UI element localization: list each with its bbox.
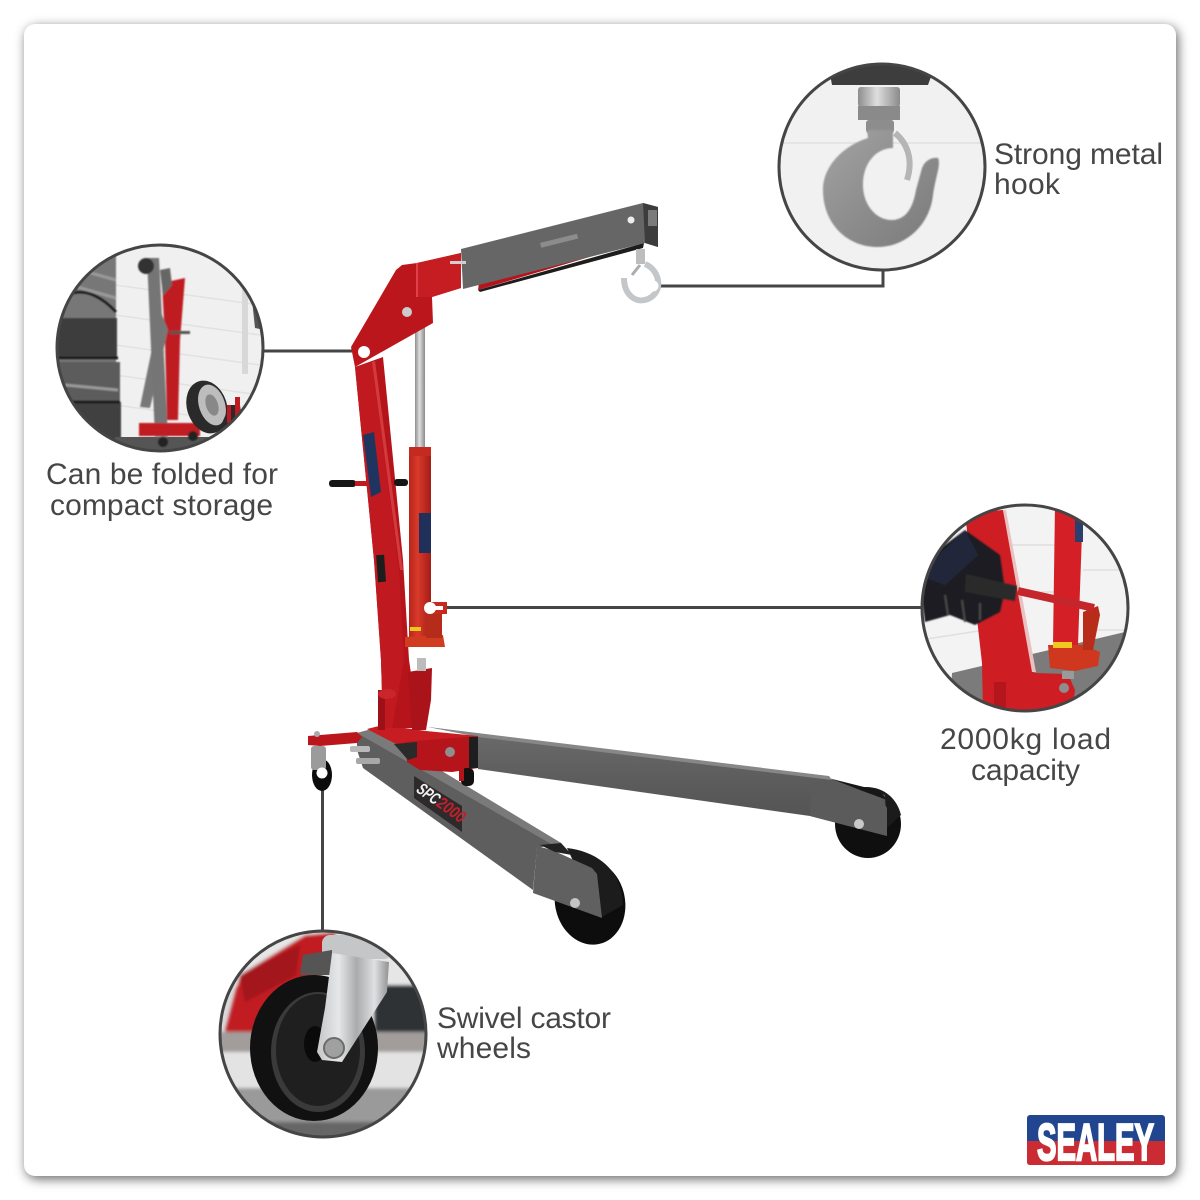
capacity label [940,723,1111,787]
swivel collar [858,87,900,107]
lower strut [408,668,432,730]
floor [115,437,208,450]
photo circle: load capacity pump [918,505,1135,720]
right rear wheel [835,787,901,858]
SPC 2000 badge: SPC [412,780,445,808]
hook label [994,138,1163,201]
spare wheel [186,380,227,434]
red cylinder [1053,505,1083,645]
crank handle [329,479,408,487]
safety sticker [363,432,381,497]
capacity label: capacity [971,754,1080,787]
base block [308,725,478,786]
gloved hand [918,530,1017,625]
hook label: Strong metal [994,138,1163,171]
castor arm [308,732,362,746]
red boom head [351,253,466,367]
folding label [46,458,278,522]
swivel castor [311,731,332,791]
leader line: castor [321,788,324,932]
pump [405,604,445,647]
right leg [428,727,901,858]
engine crane [308,203,901,951]
drain pipe [242,288,248,374]
leader line: hook [660,268,883,286]
hydraulic ram [405,312,445,671]
photo circle: strong metal hook [778,64,988,270]
castor label: wheels [436,1032,531,1065]
castor label: Swivel castor [437,1002,611,1035]
photo circle: swivel castor [215,925,430,1143]
capacity label: 2000kg load [940,723,1111,756]
jib underside [830,64,932,85]
hook label: hook [994,168,1061,201]
jib extension [461,203,658,292]
photo circle: folded storage [55,240,265,455]
upright column [329,357,419,730]
hook body [823,130,939,247]
small castor [459,768,474,786]
leader line: load capacity [445,606,924,609]
pump base [1048,606,1100,693]
tyre stack [58,256,122,439]
folding label: compact storage [50,489,273,522]
folded crane [138,258,200,447]
red socket [994,682,1006,708]
left leg [350,729,633,951]
background [222,932,424,1136]
SPC 2000 badge [412,776,471,832]
pump handle [1018,591,1094,608]
castor bracket [300,935,392,1062]
castor wheel [250,975,378,1121]
left front wheel [547,853,633,951]
red upright [965,510,1075,712]
leader line: folding [262,350,352,352]
axle stands [222,397,240,429]
floor [952,632,1124,700]
hook latch [895,133,910,180]
crane hook [624,249,658,300]
folding label: Can be folded for [46,458,278,491]
SPC 2000 badge: 2000 [432,794,471,826]
castor label [436,1002,611,1065]
